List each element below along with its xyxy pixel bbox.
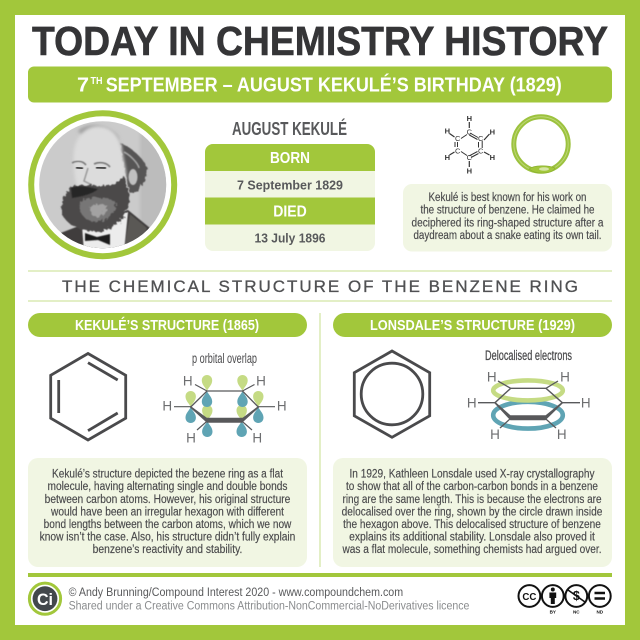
column divider <box>319 313 321 567</box>
title: TODAY IN CHEMISTRY HISTORY <box>32 18 608 64</box>
explanation text: delocalised over the ring, shown by the circle drawn inside <box>342 506 602 518</box>
icon: benzene molecule with atoms <box>445 114 495 175</box>
date banner: SEPTEMBER – AUGUST KEKULÉ’S BIRTHDAY (1829) <box>106 74 562 96</box>
hexagon with inscribed circle <box>354 351 430 437</box>
delocalised electrons diagram: H <box>467 396 477 410</box>
credit text: © Andy Brunning/Compound Interest 2020 - www.compoundchem.com <box>69 587 403 599</box>
icon: benzene molecule with atoms: C <box>467 153 473 162</box>
explanation text: explains its additional stability. Lonsdale also proved it <box>349 531 596 543</box>
delocalised electrons diagram: H <box>557 427 567 442</box>
delocalised electrons diagram: H <box>581 396 591 410</box>
explanation text: the hexagon above. This delocalised structure of benzene <box>343 519 601 531</box>
icon: Creative Commons licence badges: ND <box>596 610 604 614</box>
credit text <box>69 587 469 612</box>
icon: Creative Commons licence badges <box>518 585 611 614</box>
p orbital diagram <box>162 374 287 446</box>
hair <box>120 143 147 194</box>
delocalised electrons diagram <box>467 370 591 442</box>
p orbital diagram: H <box>162 398 172 414</box>
shirt <box>82 212 128 252</box>
delocalised electrons diagram: H <box>487 370 497 384</box>
icon: benzene molecule with atoms: H <box>445 127 450 136</box>
icon: benzene molecule with atoms: H <box>490 127 495 136</box>
delocalised electrons diagram: H <box>490 427 500 442</box>
icon: benzene molecule with atoms: C <box>467 127 473 136</box>
explanation text <box>333 458 612 567</box>
explanation text <box>28 458 307 567</box>
label: p orbital overlap: p orbital overlap <box>192 351 257 366</box>
explanation text: bond lengths between the carbon atoms, which we now <box>44 519 292 531</box>
portrait of August Kekulé <box>31 113 174 260</box>
explanation text: between carbon atoms. However, his original structure <box>45 494 290 506</box>
icon: Creative Commons licence badges: $ <box>573 589 580 603</box>
date banner <box>28 66 612 102</box>
born and died table: 13 July 1896 <box>254 230 326 246</box>
born and died table: DIED <box>273 204 307 220</box>
icon: snake eating its own tail <box>514 117 568 173</box>
benzene description: Kekulé is best known for his work on <box>428 192 586 204</box>
born and died table: 7 September 1829 <box>237 178 343 192</box>
panel: Lonsdale's structure <box>333 313 612 567</box>
icon: benzene molecule with atoms: H <box>490 153 495 162</box>
date banner: TH <box>90 76 102 87</box>
explanation text: Kekulé’s structure depicted the bezene ring as a flat <box>52 469 284 481</box>
benzene description: the structure of benzene. He claimed he <box>420 205 594 217</box>
icon: Creative Commons licence badges: BY <box>550 610 556 614</box>
explanation text: In 1929, Kathleen Lonsdale used X-ray crystallography <box>350 469 595 481</box>
icon: benzene molecule with atoms: C <box>478 134 484 143</box>
benzene description: daydream about a snake eating its own tail. <box>414 230 602 242</box>
heading pill <box>333 313 612 337</box>
explanation text: know isn’t the case. Also, his structure didn’t fully explain <box>40 531 295 543</box>
benzene description <box>403 184 612 252</box>
icon: Compound Interest logo: Ci <box>37 590 53 609</box>
heading pill: KEKULÉ’S STRUCTURE (1865) <box>75 317 259 334</box>
icon: benzene molecule with atoms: C <box>455 146 461 155</box>
section heading: THE CHEMICAL STRUCTURE OF THE BENZENE RING <box>62 277 578 296</box>
label: delocalised electrons: Delocalised electrons <box>485 348 572 363</box>
explanation text: to show that all of the carbon-carbon bonds in a benzene <box>346 481 598 493</box>
icon: Compound Interest logo <box>29 583 61 614</box>
icon: benzene molecule with atoms: H <box>467 166 472 175</box>
bow tie <box>85 233 110 245</box>
footer rule <box>28 573 612 577</box>
icon: benzene molecule with atoms: H <box>445 153 450 162</box>
explanation text: was a flat molecule, something chemists had argued over. <box>342 544 602 556</box>
panel: Kekulé's structure <box>28 313 307 567</box>
icon: Creative Commons licence badges: NC <box>573 610 580 614</box>
skeletal hexagon with double bonds <box>51 354 126 440</box>
credit text: Shared under a Creative Commons Attribution-NonCommercial-NoDerivatives licence <box>69 600 469 612</box>
p orbital diagram: H <box>256 374 266 388</box>
name heading: AUGUST KEKULÉ <box>232 118 347 139</box>
icon: benzene molecule with atoms: C <box>455 134 461 143</box>
face <box>74 126 126 192</box>
born and died table <box>205 144 375 251</box>
jacket <box>60 210 150 248</box>
benzene description: deciphered its ring-shaped structure after a <box>412 217 604 229</box>
p orbital diagram: H <box>186 430 196 446</box>
heading pill: LONSDALE’S STRUCTURE (1929) <box>370 318 575 334</box>
explanation text: molecule, having alternating single and double bonds <box>48 481 288 493</box>
p orbital diagram: H <box>277 398 287 414</box>
icon: Creative Commons licence badges: CC <box>522 591 537 603</box>
p orbital diagram: H <box>252 430 262 446</box>
delocalised electrons diagram: H <box>560 370 570 384</box>
heading pill <box>28 313 307 337</box>
date banner: 7 <box>77 74 89 96</box>
icon: benzene molecule with atoms: C <box>478 146 484 155</box>
born and died table: BORN <box>270 150 310 167</box>
explanation text: ring are the same length. This is because the electrons are <box>342 494 602 506</box>
icon: benzene molecule with atoms: H <box>467 114 472 123</box>
p orbital diagram: H <box>183 374 193 388</box>
explanation text: benzene’s reactivity and stability. <box>93 544 242 556</box>
beard <box>61 176 129 231</box>
explanation text: would have been an irregular hexagon with different <box>50 506 285 518</box>
